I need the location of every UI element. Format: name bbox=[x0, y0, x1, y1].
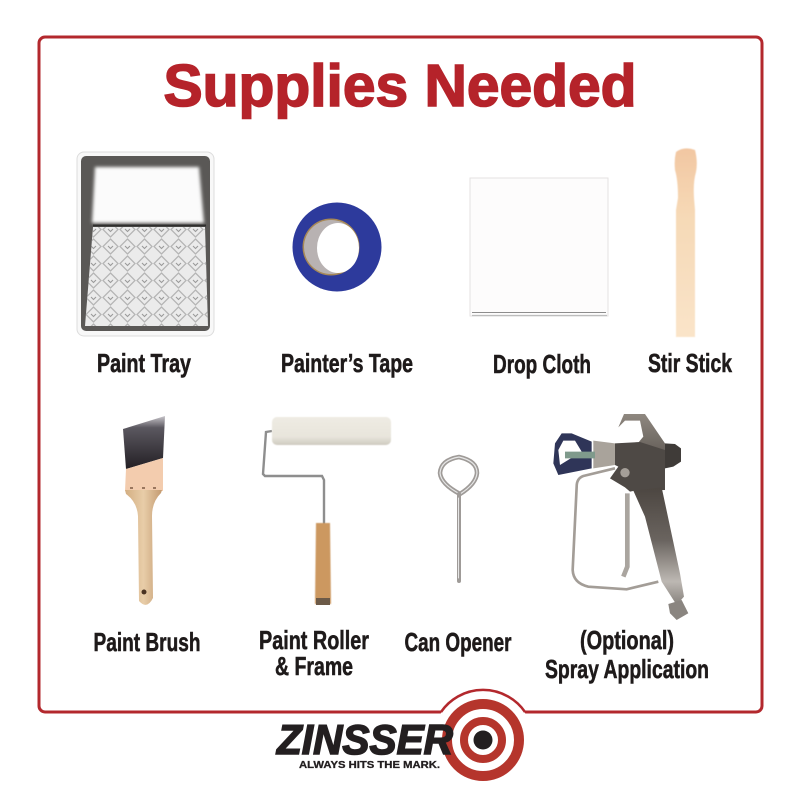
title: Supplies Needed bbox=[164, 53, 636, 119]
logo target bbox=[433, 690, 533, 790]
icon: painter's tape bbox=[292, 202, 382, 292]
label: paint roller and frame bbox=[259, 625, 369, 681]
icon: paint brush bbox=[123, 416, 165, 605]
icon: stir stick bbox=[675, 148, 697, 337]
label: can opener: Can Opener bbox=[404, 627, 512, 657]
label: drop cloth: Drop Cloth bbox=[493, 349, 591, 379]
label: paint tray: Paint Tray bbox=[97, 348, 191, 378]
label: painter's tape: Painter’s Tape bbox=[281, 348, 413, 378]
icon: paint roller and frame bbox=[263, 417, 391, 605]
icon: spray gun bbox=[553, 414, 688, 620]
icon: paint tray bbox=[77, 152, 214, 336]
logo wordmark: ZINSSER bbox=[276, 716, 454, 763]
panel: supplies frame bbox=[39, 37, 762, 712]
label: spray application bbox=[545, 625, 709, 684]
label: paint brush: Paint Brush bbox=[94, 627, 200, 657]
label: spray application: (Optional) bbox=[580, 625, 674, 655]
label: stir stick: Stir Stick bbox=[648, 348, 732, 378]
icon: drop cloth bbox=[470, 178, 608, 316]
logo: Zinsser bbox=[276, 690, 533, 790]
label: paint roller and frame: Paint Roller bbox=[259, 625, 369, 655]
logo tagline: ALWAYS HITS THE MARK. bbox=[299, 759, 440, 771]
label: spray application: Spray Application bbox=[545, 654, 709, 684]
icon: can opener bbox=[440, 457, 477, 581]
label: paint roller and frame: & Frame bbox=[275, 651, 353, 681]
